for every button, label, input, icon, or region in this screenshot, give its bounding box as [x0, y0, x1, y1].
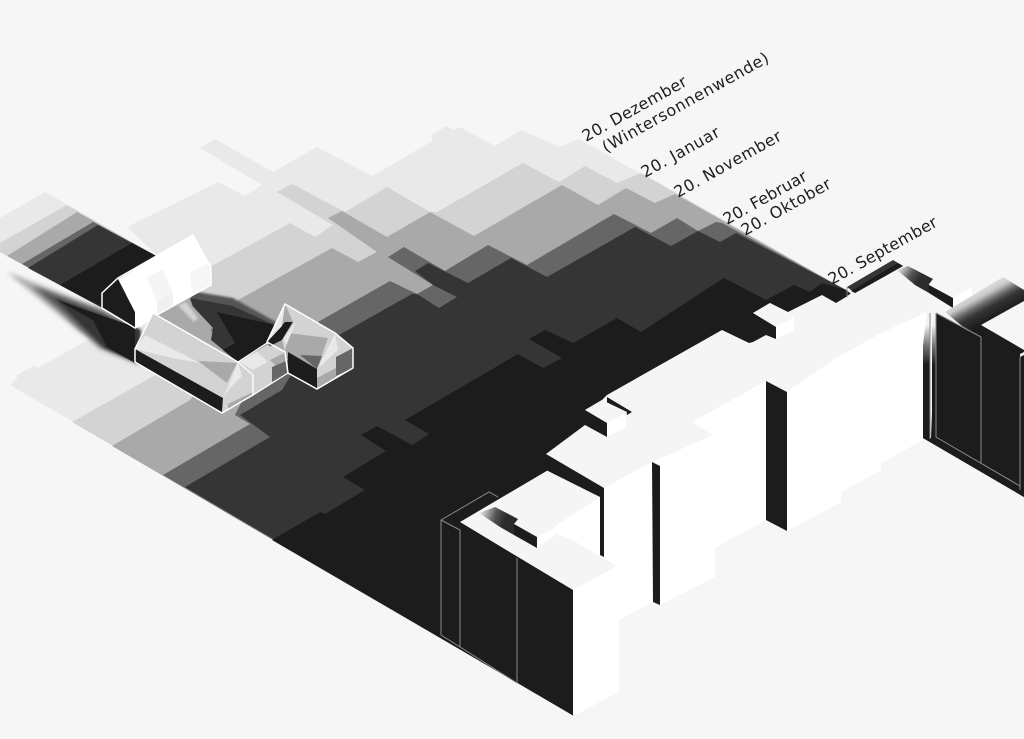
east block: black wall — [923, 277, 1024, 497]
building: dormer 2 — [585, 397, 632, 437]
building west end: outlines — [441, 492, 517, 683]
building: black recess — [546, 454, 604, 557]
neighbouring building: roof — [460, 262, 935, 716]
dark slit — [267, 322, 293, 346]
label: Wintersonnenwende: (Wintersonnenwende) — [599, 48, 772, 156]
house 1: white roof — [102, 235, 211, 328]
label: 20. November: 20. November — [671, 126, 785, 201]
house 2: long building — [135, 313, 253, 413]
shadow layer: 20. Dezember — [10, 126, 846, 500]
label: 20. Februar: 20. Februar — [720, 166, 811, 228]
building: september shadow strip — [847, 260, 903, 297]
roof — [135, 313, 238, 398]
label: 20. Dezember: 20. Dezember — [579, 72, 690, 145]
building: dormer 3 — [753, 303, 794, 342]
dark gable — [102, 279, 135, 328]
neighbouring building: white walls — [554, 312, 927, 716]
shadow map: all monthly shadow layers — [10, 126, 900, 716]
shadow layer: 20. November — [112, 185, 846, 716]
label: 20. Oktober: 20. Oktober — [738, 174, 835, 239]
gable — [317, 333, 353, 389]
house shadow band, west — [0, 192, 160, 312]
building west end: small dormer — [514, 524, 556, 548]
house 2: annex — [238, 343, 288, 395]
date labels — [579, 48, 941, 288]
roof — [118, 235, 211, 328]
roof — [282, 304, 335, 369]
shadow layer: 20. Januar — [72, 163, 846, 500]
gable — [222, 362, 253, 413]
building: black slot 2 — [766, 381, 787, 531]
courtyard shadow — [157, 290, 276, 362]
label: 20. September: 20. September — [825, 212, 941, 288]
house shadow sliver — [7, 272, 140, 364]
shadow layer: core shadow — [272, 278, 900, 716]
building: black slot 1 — [652, 462, 660, 605]
shadow layer: 20. Februar and 20. Oktober — [163, 214, 846, 716]
dark wall — [288, 352, 317, 389]
building: rear shadow and dormer — [897, 266, 972, 308]
shadow layer: 20. September — [185, 227, 846, 716]
house 3 — [267, 304, 353, 389]
dark wall — [135, 349, 223, 413]
label: 20. Januar: 20. Januar — [638, 122, 723, 181]
building west end: shadow strip — [479, 507, 518, 535]
